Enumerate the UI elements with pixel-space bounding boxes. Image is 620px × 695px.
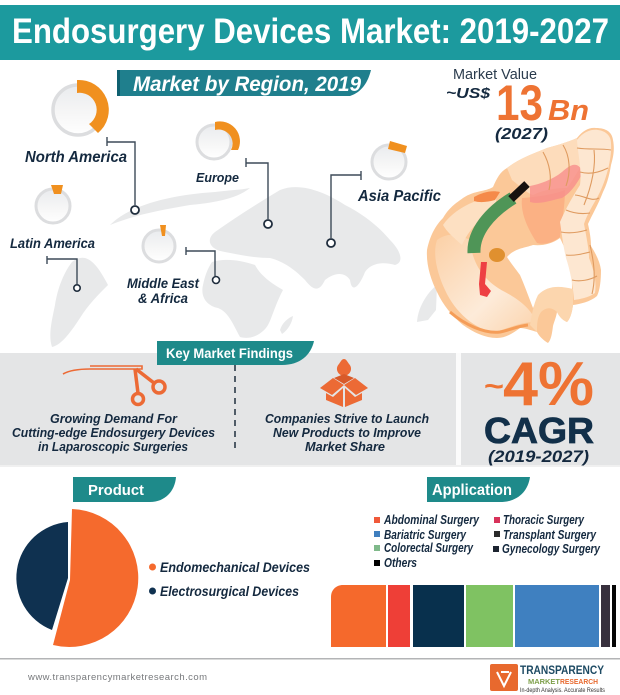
heading: application: Application: [432, 482, 512, 499]
stat: CAGR: CAGR: [484, 410, 594, 451]
title banner: [0, 5, 620, 60]
leader: Latin America: [47, 256, 80, 291]
label: Latin America: Latin America: [10, 235, 95, 251]
heading: key market findings: Key Market Findings: [166, 346, 293, 361]
upper stomach fold: [443, 195, 496, 245]
legend: product: Electrosurgical Devices: [160, 583, 299, 599]
red blush: [530, 165, 583, 203]
logo: transparency market research: In-depth Analysis. Accurate Results: [520, 688, 605, 694]
leader: Middle East and Africa: [186, 247, 220, 284]
donut: Middle East and Africa: [143, 225, 175, 262]
market value callout: Bn: [548, 95, 589, 127]
endoscope shaft: [474, 198, 513, 253]
divider: [234, 365, 236, 448]
transverse colon: [507, 138, 582, 195]
ascending colon pale segments: [560, 130, 611, 300]
donut: Asia Pacific: [372, 141, 407, 179]
illustration: colon with endoscope: [427, 128, 614, 343]
polyp: [489, 248, 505, 262]
endoscope tip: [511, 184, 527, 199]
text: companies strive: [265, 412, 429, 454]
label: Europe: Europe: [196, 170, 239, 185]
text: growing demand: in Laparoscopic Surgeries: [38, 440, 188, 454]
stat: CAGR: ~: [484, 370, 504, 403]
heading: application: [427, 477, 530, 502]
heading: key market findings: [157, 341, 314, 365]
footer rule: [0, 658, 620, 660]
website url: www.transparencymarketresearch.com: [27, 672, 207, 683]
organ silhouette: [427, 128, 614, 343]
label: North America: North America: [25, 149, 127, 166]
market value callout: (2027): [495, 126, 548, 143]
legend: product: [149, 559, 310, 599]
stat: CAGR: 4%: [503, 350, 594, 419]
heading: product: Product: [88, 482, 144, 499]
slice: electrosurgical devices: [16, 522, 68, 630]
slice: endomechanical devices: [53, 509, 138, 647]
legend: application: Colorectal Surgery: [384, 541, 474, 555]
legend: application: Transplant Surgery: [503, 528, 597, 542]
heading: product: [73, 477, 176, 502]
leader: Europe: [246, 158, 272, 228]
icon: product box with light bulb: [320, 359, 368, 407]
legend: application: Bariatric Surgery: [384, 528, 467, 542]
orange flare: [474, 191, 500, 202]
leader: Asia Pacific: [327, 171, 361, 247]
label: Asia Pacific: Asia Pacific: [357, 188, 441, 205]
legend: application: [374, 513, 601, 570]
tissue: [522, 190, 565, 244]
pie chart: product: [16, 509, 138, 647]
bleeding tissue: [479, 262, 491, 297]
leader: North America: [107, 137, 139, 214]
stat: CAGR: [484, 350, 594, 466]
text: companies strive: New Products to Improve: [273, 426, 421, 440]
sub-heading: market by region: Market by Region, 2019: [133, 73, 361, 96]
segment seams: [543, 145, 611, 294]
market value callout: Market Value: [453, 67, 537, 83]
descending lower tube: [530, 287, 573, 332]
text: companies strive: Market Share: [305, 440, 385, 454]
world map: [50, 187, 437, 347]
stacked bar: application: [331, 585, 616, 647]
label: Middle East and Africa: & Africa: [138, 291, 188, 306]
panel: key market findings band: [0, 353, 620, 467]
legend: application: Abdominal Surgery: [383, 513, 480, 527]
legend: product: Endomechanical Devices: [160, 559, 310, 575]
text: growing demand: [12, 412, 215, 454]
logo: transparency market research: TRANSPARENCY: [520, 665, 604, 677]
stat: CAGR: (2019-2027): [488, 447, 589, 466]
label: Middle East and Africa: [127, 276, 199, 306]
legend: application: Others: [384, 556, 417, 570]
legend: application: Thoracic Surgery: [503, 513, 585, 527]
central white hole: [507, 238, 572, 308]
icon: laparoscopic scissors: [63, 366, 165, 404]
market value callout: 13: [496, 75, 543, 131]
label: Middle East and Africa: Middle East: [127, 276, 199, 291]
donut: Europe: [197, 121, 240, 159]
donut: North America: [53, 80, 109, 135]
logo: transparency market research: RESEARCH: [560, 679, 598, 686]
text: growing demand: Growing Demand For: [50, 412, 178, 426]
stomach pale interior: [435, 235, 536, 332]
text: growing demand: Cutting-edge Endosurgery Devices: [12, 426, 215, 440]
logo: transparency market research: [490, 664, 605, 694]
stomach lower rim: [450, 312, 528, 332]
market value callout: [446, 67, 589, 143]
market value callout: ~US$: [446, 85, 491, 102]
logo: transparency market research: MARKET: [528, 679, 561, 686]
text: companies strive: Companies Strive to Launch: [265, 412, 429, 426]
donut: Latin America: [36, 185, 70, 223]
